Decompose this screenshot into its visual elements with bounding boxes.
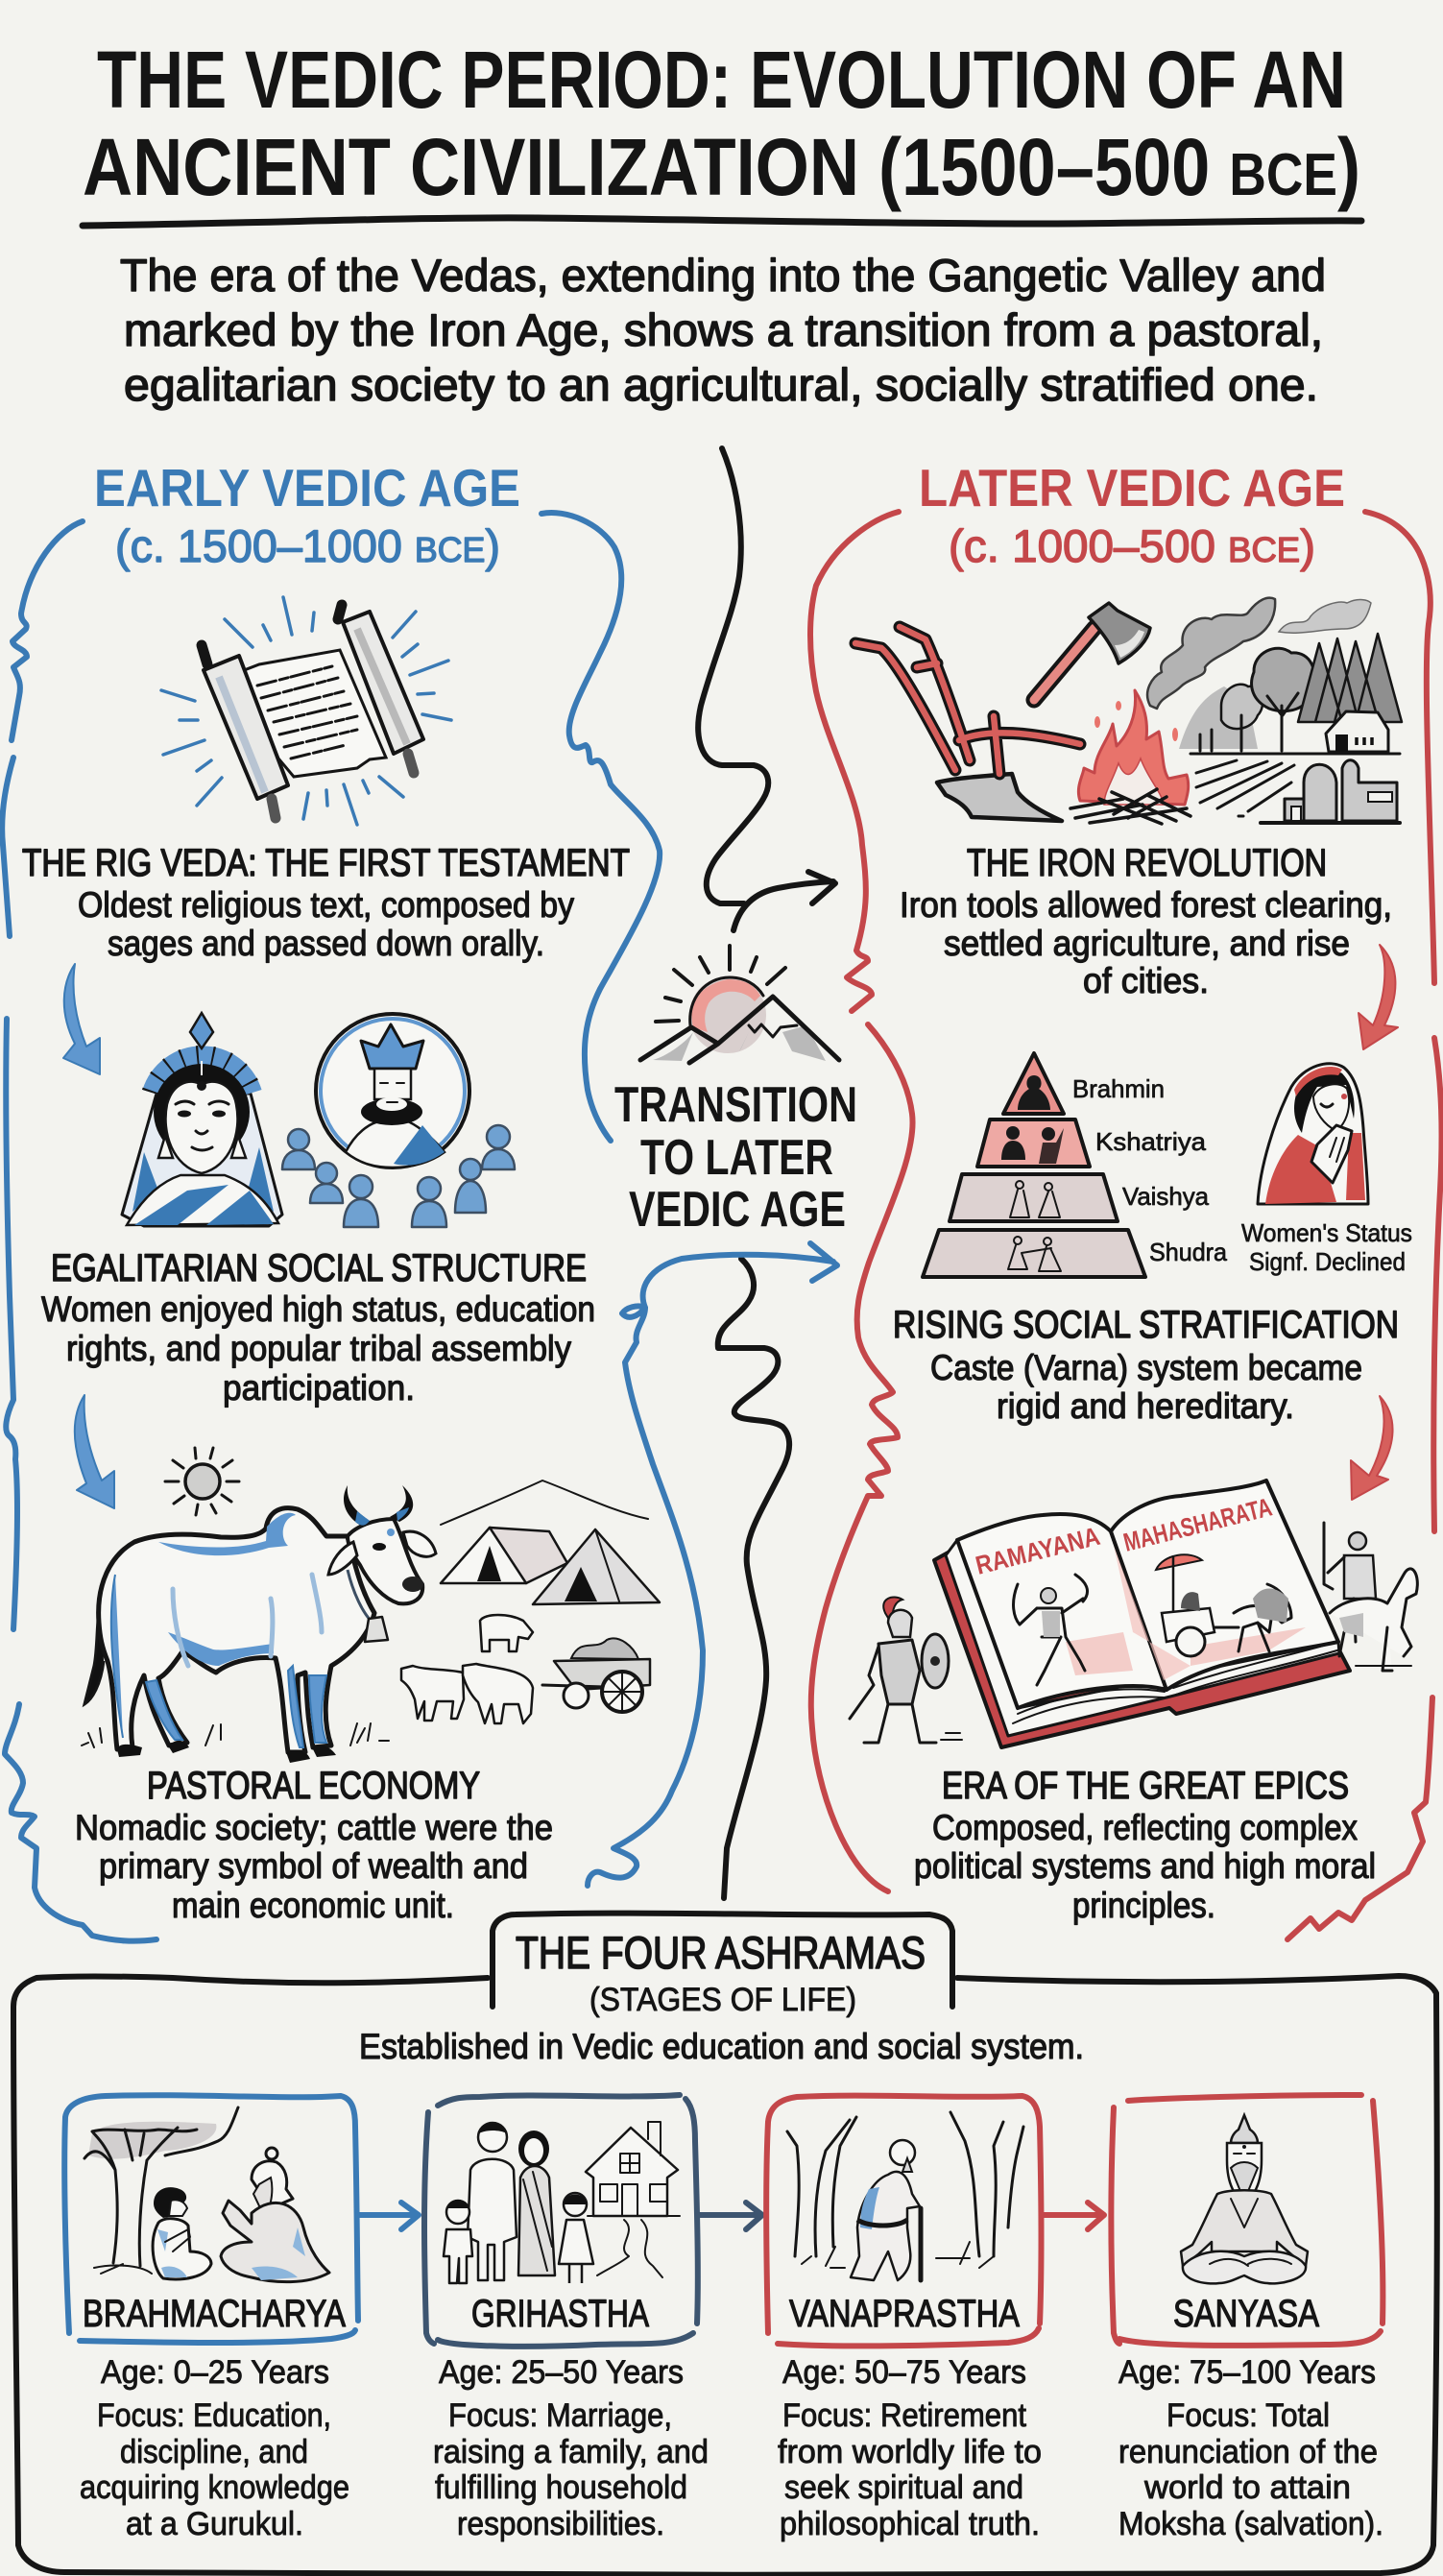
stage text: vanaprastha: seek spiritual and: [784, 2469, 1023, 2506]
icon: fields and town: [1196, 760, 1400, 823]
arrow: to later vedic age (black): [734, 872, 835, 930]
label: sanyasa: SANYASA: [1173, 2293, 1319, 2335]
transition label: TO LATER: [640, 1130, 833, 1186]
stage text: grihastha: responsibilities.: [457, 2506, 664, 2542]
text: great epics: principles.: [1072, 1886, 1215, 1925]
arrow: blue down arrow 1: [63, 964, 100, 1074]
heading: later vedic age: LATER VEDIC AGE: [919, 458, 1345, 518]
panel outline with heading tab: [13, 1914, 1437, 2575]
text: pastoral economy: Nomadic society; cattle were the: [75, 1808, 553, 1847]
transition label: TRANSITION: [614, 1077, 857, 1133]
book title: ramayana: RAMAYANA: [973, 1522, 1103, 1580]
text: women's status: Women's Status: [1241, 1218, 1412, 1247]
book illustration: chariot: [1156, 1554, 1291, 1656]
title underline: [83, 218, 1361, 226]
text: pastoral economy: [75, 1765, 553, 1925]
heading: four ashramas: [516, 1927, 926, 2018]
stage text: sanyasa: world to attain: [1143, 2469, 1351, 2506]
blue bracket outline: [2, 513, 703, 1941]
icon: zebu cow: [82, 1485, 436, 1763]
icon: rig veda scroll: [161, 597, 451, 825]
intro text: egalitarian society to an agricultural, socially stratified one.: [124, 359, 1318, 410]
text: iron revolution: settled agriculture, and rise: [944, 924, 1350, 963]
stage text: grihastha: [433, 2354, 709, 2542]
text: great epics: Composed, reflecting complex: [932, 1808, 1358, 1847]
text: rising social stratification: Caste (Varna) system became: [930, 1348, 1362, 1387]
pyramid tier: kshatriya: [977, 1119, 1090, 1167]
pyramid labels: [1072, 1074, 1228, 1266]
text: women's status: [1241, 1218, 1412, 1276]
text: iron revolution: Iron tools allowed forest clearing,: [900, 885, 1392, 925]
icon: open epic book: [934, 1481, 1350, 1747]
stage text: grihastha: Focus: Marriage,: [448, 2397, 672, 2434]
illustration: old man in forest: [787, 2112, 1023, 2280]
icon: tribal king: [316, 1014, 469, 1168]
card: brahmacharya: [64, 2095, 358, 2343]
heading: early vedic age: [94, 458, 520, 571]
icon: mountain and tents: [441, 1481, 660, 1604]
arrow: blue down arrow 2: [75, 1395, 114, 1508]
book illustration: warrior: [1014, 1575, 1088, 1685]
label: brahmacharya: BRAHMACHARYA: [83, 2293, 346, 2335]
stage text: sanyasa: Age: 75–100 Years: [1118, 2354, 1376, 2391]
intro text: marked by the Iron Age, shows a transition from a pastoral,: [124, 304, 1323, 355]
illustration: meditating sage: [1181, 2115, 1308, 2283]
arrow: red down arrow 1: [1359, 945, 1398, 1049]
label: grihastha: GRIHASTHA: [471, 2293, 649, 2335]
icon: praying woman: [1258, 1064, 1368, 1204]
stage text: vanaprastha: philosophical truth.: [780, 2506, 1040, 2542]
text: rig veda: THE RIG VEDA: THE FIRST TESTAMENT: [22, 842, 630, 884]
card: vanaprastha: [766, 2096, 1041, 2346]
icon: horseman: [1324, 1523, 1417, 1671]
panel: central transition flow: [614, 448, 857, 1898]
icon: vedic woman: [122, 1013, 282, 1226]
icon: fire: [1070, 690, 1190, 824]
pyramid tier: shudra: [923, 1230, 1145, 1277]
stage text: grihastha: raising a family, and: [433, 2434, 709, 2470]
stage text: sanyasa: Focus: Total: [1166, 2397, 1330, 2434]
illustration: guru and student under tree: [84, 2107, 329, 2282]
arrow: red down arrow 2: [1351, 1396, 1393, 1500]
card: sanyasa: [1111, 2095, 1383, 2346]
heading: four ashramas: THE FOUR ASHRAMAS: [516, 1927, 926, 1978]
text: women's status: Signf. Declined: [1249, 1247, 1406, 1276]
label: vanaprastha: VANAPRASTHA: [789, 2293, 1020, 2335]
stage text: grihastha: Age: 25–50 Years: [439, 2354, 684, 2391]
text: great epics: ERA OF THE GREAT EPICS: [942, 1765, 1349, 1807]
icon: tribal assembly crowd: [282, 1125, 515, 1227]
pyramid labels: Shudra: [1149, 1238, 1228, 1266]
stage text: grihastha: fulfilling household: [435, 2469, 687, 2506]
title: [83, 35, 1360, 212]
text: rising social stratification: [893, 1304, 1399, 1426]
text: pastoral economy: main economic unit.: [172, 1886, 454, 1925]
text: rig veda: sages and passed down orally.: [108, 924, 544, 963]
heading: later vedic age: (c. 1000–500 BCE): [949, 520, 1315, 571]
chart: varna pyramid: [923, 1053, 1145, 1277]
pyramid tier: vaishya: [950, 1174, 1118, 1221]
text: pastoral economy: PASTORAL ECONOMY: [147, 1765, 480, 1807]
icon: sun: [165, 1448, 239, 1515]
stage text: vanaprastha: [778, 2354, 1042, 2542]
stage text: sanyasa: [1118, 2354, 1383, 2542]
icon: iron axe: [1034, 603, 1150, 700]
text: iron revolution: of cities.: [1083, 961, 1209, 1000]
title: ANCIENT CIVILIZATION (1500–500 BCE): [83, 122, 1360, 212]
text: iron revolution: [900, 842, 1392, 1000]
illustration: family and house: [444, 2122, 680, 2283]
red bracket outline: [810, 512, 1442, 1939]
heading: early vedic age: (c. 1500–1000 BCE): [115, 520, 500, 571]
text: great epics: political systems and high moral: [914, 1846, 1376, 1886]
stage text: sanyasa: Moksha (salvation).: [1118, 2506, 1383, 2542]
text: iron revolution: THE IRON REVOLUTION: [967, 842, 1327, 884]
stage text: vanaprastha: from worldly life to: [778, 2434, 1042, 2470]
icon: foot soldier: [850, 1598, 962, 1743]
text: egalitarian social structure: participation.: [223, 1368, 415, 1408]
stage text: brahmacharya: at a Gurukul.: [126, 2506, 303, 2542]
transition label: [614, 1077, 857, 1238]
stage text: vanaprastha: Focus: Retirement: [782, 2397, 1027, 2434]
intro text: The era of the Vedas, extending into the Gangetic Valley and: [120, 250, 1326, 301]
arrow: brahmacharya to grihastha: [357, 2203, 419, 2229]
stage text: brahmacharya: acquiring knowledge: [80, 2469, 349, 2506]
book title: mahasharata: MAHASHARATA: [1120, 1492, 1275, 1557]
subheading: Established in Vedic education and social system.: [359, 2027, 1084, 2066]
heading: four ashramas: (STAGES OF LIFE): [589, 1982, 856, 2018]
text: pastoral economy: primary symbol of wealth and: [99, 1846, 528, 1886]
text: egalitarian social structure: EGALITARIAN SOCIAL STRUCTURE: [51, 1247, 587, 1289]
stage text: brahmacharya: discipline, and: [120, 2434, 308, 2470]
text: egalitarian social structure: Women enjoyed high status, education: [41, 1289, 595, 1329]
transition label: VEDIC AGE: [629, 1182, 846, 1238]
intro text: [120, 250, 1326, 410]
text: rising social stratification: rigid and hereditary.: [997, 1386, 1294, 1426]
stage text: sanyasa: renunciation of the: [1118, 2434, 1378, 2470]
pyramid tier: brahmin: [1003, 1053, 1064, 1114]
text: egalitarian social structure: [41, 1247, 595, 1408]
text: egalitarian social structure: rights, and popular tribal assembly: [66, 1329, 571, 1368]
arrow: vanaprastha to sanyasa: [1042, 2203, 1104, 2229]
text: rig veda: Oldest religious text, composed by: [78, 885, 574, 925]
stage text: brahmacharya: Focus: Education,: [97, 2397, 331, 2434]
heading: later vedic age: [919, 458, 1345, 571]
panel: the four ashramas: [13, 1914, 1437, 2575]
black flow line upper: [698, 448, 768, 903]
panel: early vedic age: [2, 458, 703, 1941]
stage text: brahmacharya: Age: 0–25 Years: [101, 2354, 329, 2391]
panel: later vedic age: [810, 458, 1442, 1939]
card: grihastha: [424, 2095, 698, 2347]
pyramid labels: Vaishya: [1122, 1182, 1210, 1211]
icon: sun over mountains: [640, 946, 839, 1064]
icon: sheep and cart: [401, 1615, 650, 1723]
text: rig veda: [22, 842, 630, 963]
text: great epics: [914, 1765, 1376, 1925]
black flow line lower: [718, 1259, 789, 1898]
pyramid labels: Kshatriya: [1095, 1127, 1207, 1156]
heading: early vedic age: EARLY VEDIC AGE: [94, 458, 520, 518]
icon: iron plough: [855, 627, 1080, 821]
pyramid labels: Brahmin: [1072, 1074, 1165, 1103]
icon: smoke and forest: [1147, 598, 1402, 754]
stage text: vanaprastha: Age: 50–75 Years: [782, 2354, 1026, 2391]
arrow: blue flow to later vedic age: [643, 1243, 837, 1308]
stage text: brahmacharya: [80, 2354, 349, 2542]
arrow: grihastha to vanaprastha: [699, 2203, 762, 2229]
